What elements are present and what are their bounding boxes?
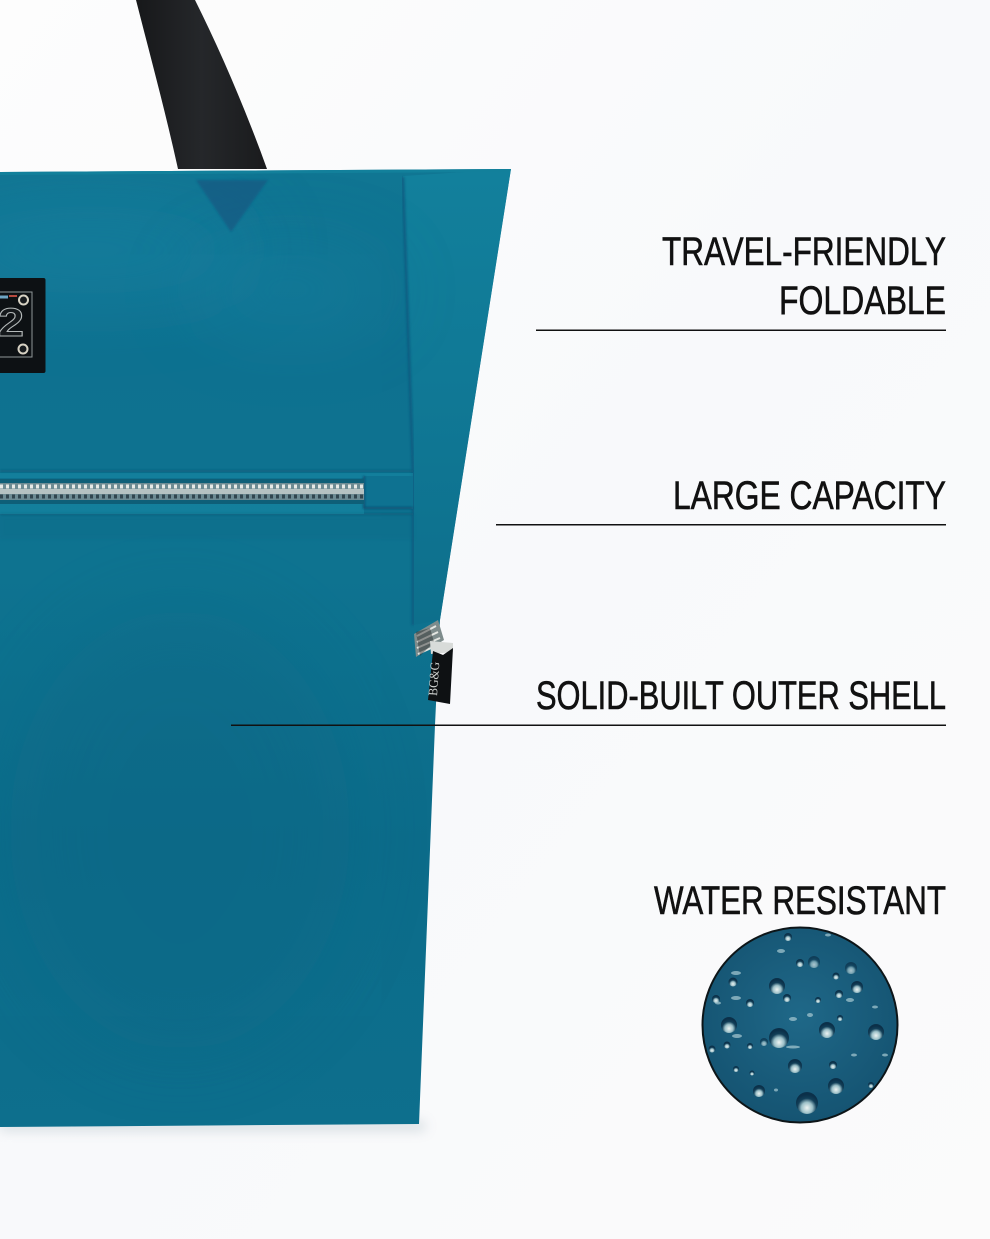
pocket band xyxy=(0,471,413,514)
side gusset xyxy=(403,169,511,625)
stitched triangle xyxy=(196,180,268,232)
feature: travel-friendly foldable xyxy=(536,230,946,331)
leader line xyxy=(536,330,946,331)
gusset seam xyxy=(403,177,413,625)
top edge xyxy=(0,169,504,175)
side zipper pull: BG&G xyxy=(425,661,442,696)
zipper xyxy=(0,479,364,504)
side zipper pull xyxy=(414,620,453,704)
fabric sheen xyxy=(0,205,260,295)
leader line xyxy=(496,524,946,526)
water droplet swatch xyxy=(702,928,898,1122)
feature: travel-friendly foldable: FOLDABLE xyxy=(779,279,946,323)
bag handle xyxy=(136,0,267,169)
leader line xyxy=(231,724,946,726)
bag ground shadow xyxy=(0,1122,425,1130)
logo badge xyxy=(0,278,46,373)
bag xyxy=(0,0,520,1135)
bag body xyxy=(0,165,520,1135)
feature: water resistant xyxy=(654,879,946,1122)
